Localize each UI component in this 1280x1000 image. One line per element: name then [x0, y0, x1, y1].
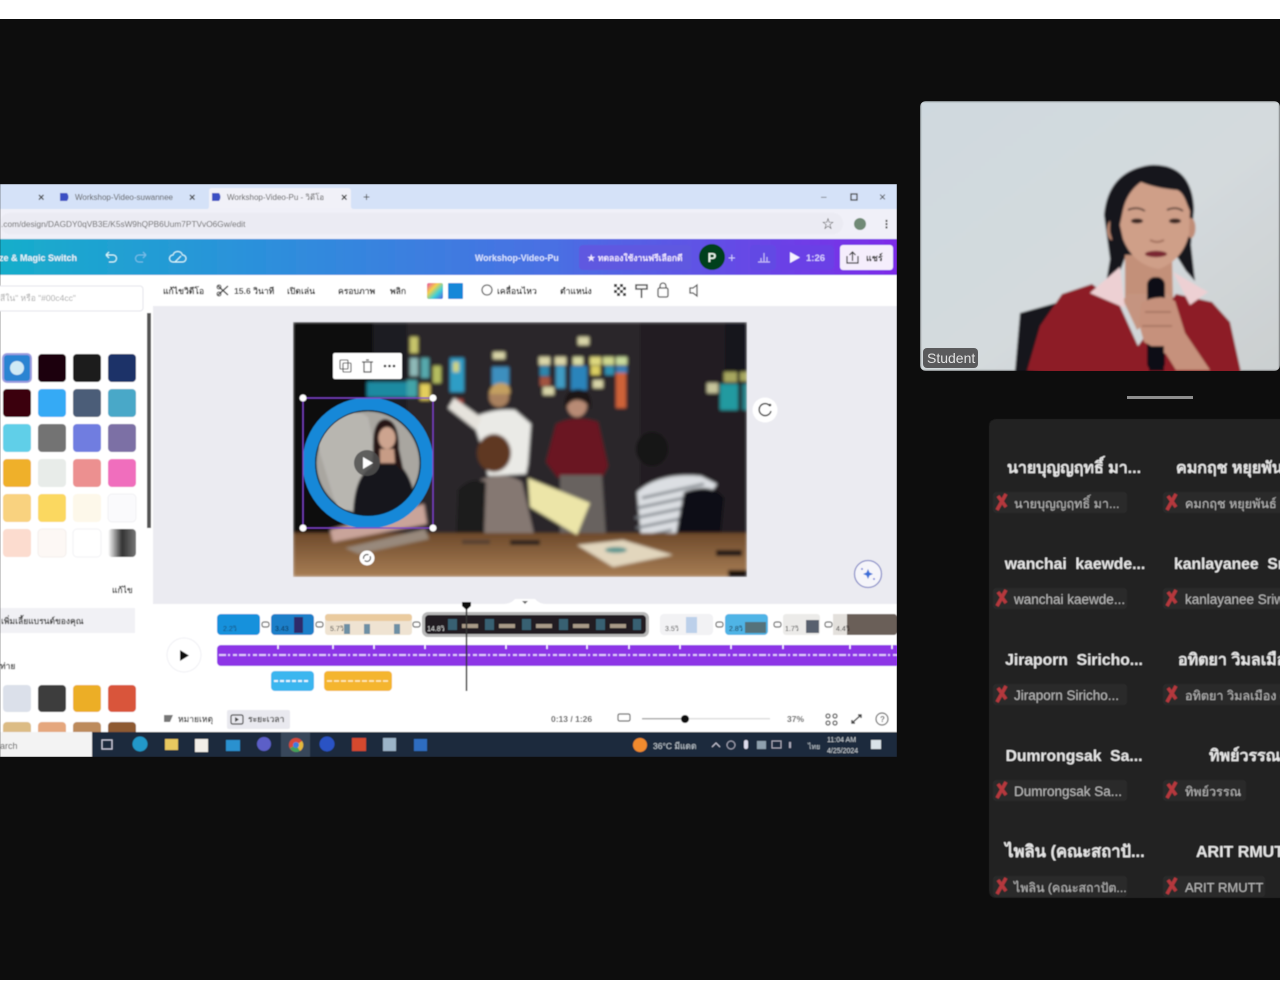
Canva header bar: แชร์	[866, 252, 883, 263]
Canva header bar: ze & Magic Switch	[0, 253, 77, 263]
audio track: purple	[217, 645, 907, 666]
lower colour swatches	[3, 685, 136, 736]
audio track: blue	[271, 671, 314, 691]
face	[1117, 180, 1190, 269]
transparency icon	[614, 284, 626, 296]
hand	[1139, 297, 1210, 370]
fringe	[1110, 176, 1192, 246]
editor toolbar	[0, 275, 897, 306]
system tray	[633, 737, 881, 755]
circular photo	[316, 411, 420, 520]
chair	[1015, 303, 1056, 371]
participant: คมกฤช	[1163, 458, 1280, 513]
icon: rotate handle	[360, 550, 374, 566]
system tray: ไทย	[807, 742, 820, 751]
Canva header bar: P	[708, 250, 717, 265]
participant: Dumrongsak: Dumrongsak Sa...	[1014, 784, 1122, 799]
browser tab bar: ×	[189, 192, 195, 204]
play button	[167, 638, 201, 672]
participant: ไพลิน: ไพลิน (คณะสถาปัต...	[1013, 881, 1127, 895]
address bar	[0, 209, 897, 239]
address bar: ⋮	[881, 219, 892, 231]
editor toolbar: เคลื่อนไหว	[497, 284, 537, 296]
participant: ทิพย์วรรณ: ทิพย์วรรณ	[1185, 785, 1242, 799]
participant: ทิพย์วรรณ: ทิพย์วรรณ	[1209, 746, 1280, 765]
participant: คมกฤช: คมกฤช หยุยพันธ์	[1185, 497, 1277, 512]
browser tab bar: ×	[879, 190, 886, 204]
participant: Dumrongsak	[993, 748, 1142, 801]
video clips track	[217, 612, 897, 637]
video frame: team at sticky-note wall	[293, 322, 747, 577]
bottom status bar: ระยะเวลา	[248, 714, 285, 724]
video clips track: 2.2วิ	[223, 625, 237, 633]
microphone	[1147, 277, 1165, 371]
video clips track: 3.5วิ	[665, 625, 679, 633]
canvas area background	[153, 306, 897, 604]
colour panel: สีใน" หรือ "#00c4cc"	[0, 293, 76, 303]
video clips track: 1.7วิ	[785, 625, 799, 633]
video clips track: 4.4วิ	[836, 625, 850, 633]
nose	[1150, 240, 1164, 242]
collar	[1090, 267, 1125, 308]
participant: ทิพย์วรรณ	[1163, 746, 1280, 801]
colour panel	[0, 286, 153, 736]
camera scene	[920, 101, 1280, 390]
colour panel: แก้ไข	[112, 585, 133, 595]
colour panel: เพิ่มเลี้ยแบรนด์ของคุณ	[1, 614, 84, 627]
seated woman	[456, 434, 534, 540]
participant: นายบุญญฤทธิ์: นายบุญญฤทธิ์ มา...	[1014, 494, 1120, 512]
seated man in stripes	[633, 433, 724, 536]
jacket	[1027, 284, 1245, 390]
Canva header bar: ★ ทดลองใช้งานฟรีเลือกดี	[587, 253, 683, 263]
editor toolbar: เปิดเล่น	[287, 286, 315, 296]
participant: ARIT RMUTT: ARIT RMUTT	[1185, 880, 1264, 895]
panel: participants	[989, 419, 1280, 898]
browser tab bar: +	[363, 190, 370, 204]
bottom status bar	[164, 710, 888, 729]
sticky notes	[367, 337, 747, 410]
participant: wanchai: wanchai kaewde...	[1013, 592, 1125, 607]
bottom status bar: หมายเหตุ	[178, 714, 213, 725]
participant: ARIT RMUTT	[1163, 844, 1280, 897]
address bar: ☆	[822, 217, 834, 231]
participant: อทิตยา	[1163, 651, 1280, 705]
table with papers	[293, 478, 747, 577]
participant: wanchai	[993, 556, 1145, 609]
Canva header bar: Workshop-Video-Pu	[475, 253, 559, 263]
presenter	[1027, 165, 1245, 390]
Canva header bar	[0, 239, 897, 275]
participant: wanchai: wanchai kaewde...	[1004, 556, 1145, 573]
browser tab bar: Workshop-Video-suwannee	[75, 193, 174, 202]
editor toolbar: ครอบภาพ	[338, 286, 375, 296]
participant: Dumrongsak: Dumrongsak Sa...	[1006, 748, 1142, 765]
participant: kanlayanee	[1163, 556, 1280, 609]
bottom status bar: 0:13 / 1:26	[551, 714, 592, 724]
Canva header bar: +	[728, 250, 736, 265]
participant: Jiraporn: Jiraporn Siricho...	[1014, 688, 1119, 703]
video clips track: 3.43	[275, 626, 289, 633]
shared browser window	[0, 184, 907, 757]
ears	[1107, 220, 1117, 240]
system tray: 4/25/2024	[827, 748, 858, 755]
bottom status bar: 37%	[787, 714, 804, 724]
name tag: Student: Student	[927, 350, 975, 366]
participant: Jiraporn	[993, 652, 1143, 705]
audio track: orange	[324, 671, 392, 691]
Canva header bar: 1:26	[806, 253, 825, 264]
video clips track: 2.8วิ	[729, 625, 743, 633]
system tray: 36°C มีแดด	[653, 741, 696, 751]
icon: refresh button	[752, 398, 778, 422]
standing man	[448, 383, 531, 476]
standing woman in red	[546, 389, 608, 537]
paint roller icon	[636, 285, 647, 298]
circular video element with selection	[300, 394, 436, 532]
participant: ไพลิน	[993, 841, 1145, 897]
windows taskbar: arch	[0, 741, 18, 751]
colour swatches	[3, 354, 136, 557]
video clips track: 14.8วิ	[427, 625, 445, 633]
neck	[1125, 255, 1173, 330]
browser tab bar: ×	[38, 192, 44, 204]
bottom status bar: ?	[880, 715, 885, 724]
colour panel: ท่าย	[0, 661, 15, 671]
browser tab bar	[0, 184, 897, 210]
editor toolbar: ตำแหน่ง	[560, 286, 592, 296]
editor toolbar: แก้ไขวิดีโอ	[163, 285, 204, 296]
office scene	[293, 322, 747, 577]
browser tab bar: ×	[341, 192, 347, 204]
participant: นายบุญญฤทธิ์	[993, 456, 1141, 513]
address bar: .com/design/DAGDY0qVB3E/K5sW9hQPB6Uum7PTVvO6Gw/edit	[1, 219, 246, 229]
divider handle	[1127, 396, 1193, 399]
participant: Jiraporn: Jiraporn Siricho...	[1005, 652, 1143, 669]
participant: นายบุญญฤทธิ์: นายบุญญฤทธิ์ มา...	[1007, 456, 1141, 478]
browser tab bar: Workshop-Video-Pu - วิดีโอ	[227, 192, 324, 202]
taskbar app icons	[102, 732, 427, 757]
video clips track: 5.7วิ	[330, 625, 344, 633]
participant: ไพลิน: ไพลิน (คณะสถาปั...	[1003, 841, 1145, 861]
element floating toolbar	[333, 353, 402, 379]
back hair	[1104, 165, 1195, 283]
system tray: 11:04 AM	[827, 737, 856, 744]
icon: magic assistant button	[854, 560, 882, 588]
editor toolbar: พลิก	[390, 286, 406, 296]
windows taskbar	[0, 732, 897, 757]
browser tab bar: –	[821, 192, 827, 203]
panel: presenter camera	[920, 101, 1280, 390]
editor toolbar: 15.6 วินาที	[234, 286, 275, 296]
lips	[1145, 251, 1167, 257]
playhead	[462, 602, 471, 691]
timeline panel	[153, 599, 907, 732]
brows and eyes	[1128, 208, 1183, 211]
